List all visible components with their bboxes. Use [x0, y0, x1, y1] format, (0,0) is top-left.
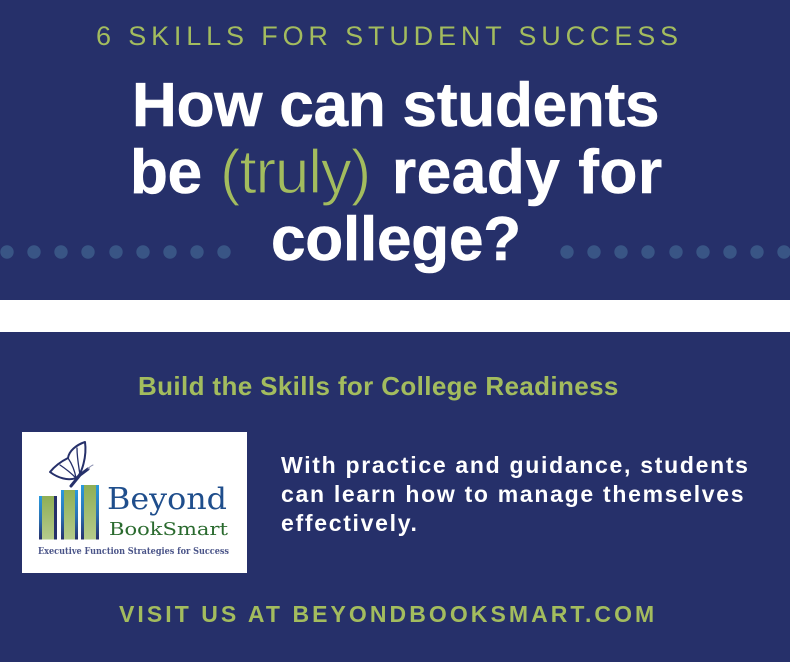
footer call to action: VISIT US AT BEYONDBOOKSMART.COM [119, 601, 657, 627]
dotted accent right [560, 245, 790, 259]
body text: With practice and guidance, students [281, 452, 750, 478]
main title: college? [271, 205, 521, 274]
logo card: Executive Function Strategies for Success [38, 547, 229, 557]
main title: How can students [132, 71, 659, 140]
body text: effectively. [281, 510, 419, 536]
eyebrow heading: 6 SKILLS FOR STUDENT SUCCESS [96, 21, 683, 51]
section heading: Build the Skills for College Readiness [138, 371, 619, 401]
main title: ready for [392, 138, 663, 207]
main title: be [130, 138, 202, 207]
main title: (truly) [220, 138, 370, 207]
body text: can learn how to manage themselves [281, 481, 745, 507]
logo card: BookSmart [109, 519, 229, 540]
logo card [22, 432, 247, 573]
white band [0, 300, 790, 332]
dotted accent left [0, 245, 231, 259]
main title [130, 71, 663, 274]
icon: butterfly [50, 442, 93, 486]
body text [281, 452, 750, 536]
logo wordmark: Beyond [107, 482, 227, 517]
icon: books [39, 485, 99, 540]
